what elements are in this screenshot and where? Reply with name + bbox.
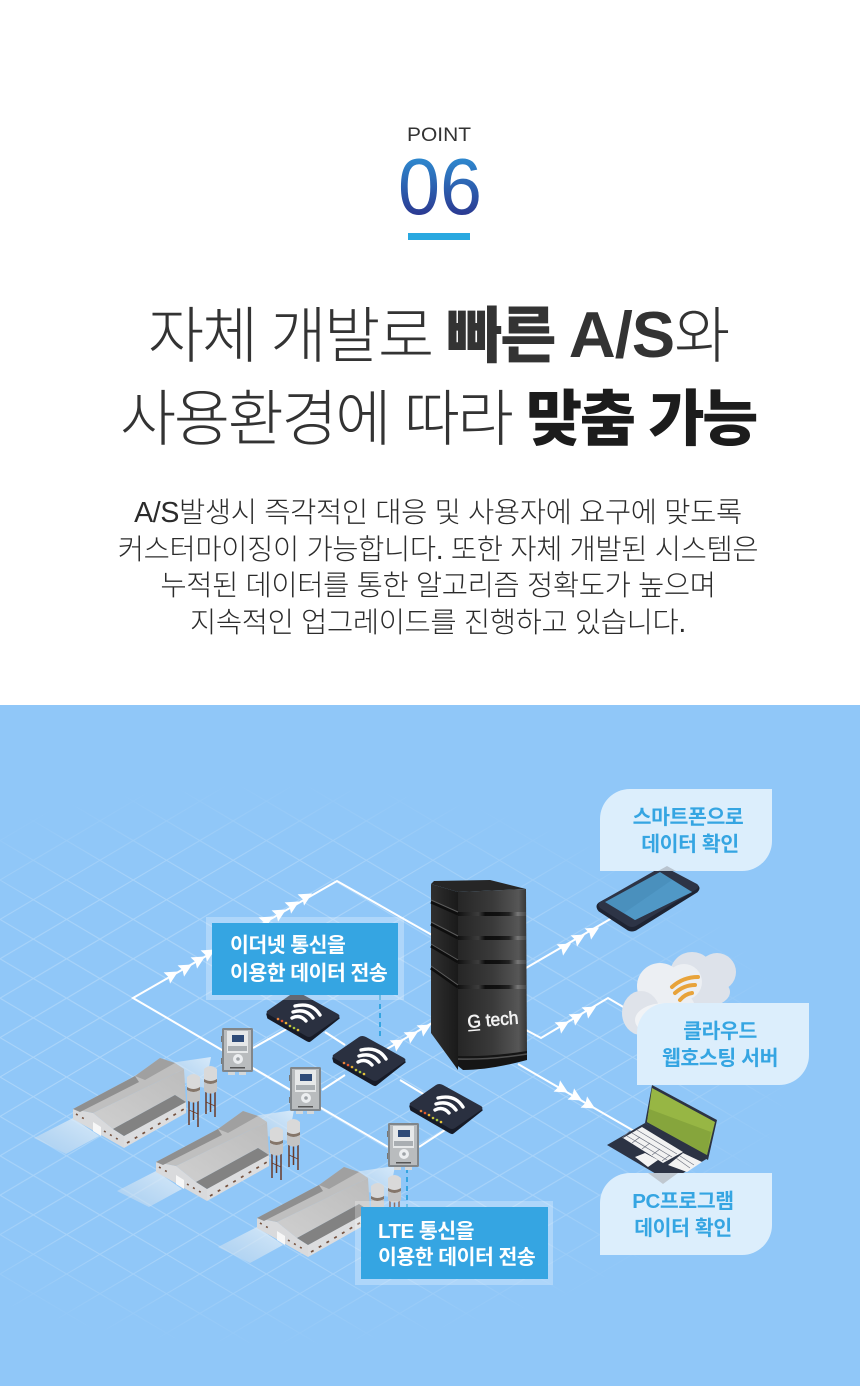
bubble: cloud: 웹호스팅 서버	[662, 1047, 778, 1070]
barn 1 with silos	[34, 1057, 217, 1154]
bubble: smartphone: 데이터 확인	[641, 833, 739, 856]
router 3	[410, 1084, 482, 1133]
point badge	[398, 124, 482, 240]
title line 1: 자체 개발로 빠른 A/S와	[148, 298, 728, 371]
controller 2	[289, 1067, 321, 1114]
callout: ethernet: 이더넷 통신을	[230, 934, 345, 957]
callout: LTE	[355, 1201, 553, 1285]
barn 2 with silos	[117, 1110, 300, 1207]
bubble: smartphone: 스마트폰으로	[633, 806, 744, 829]
description text	[118, 497, 758, 638]
number: 06: 06	[398, 142, 482, 231]
illustration panel: data network	[0, 705, 860, 1386]
callout: LTE: 이용한 데이터 전송	[378, 1246, 535, 1269]
bubble: cloud	[637, 1003, 809, 1085]
flow arrows	[164, 888, 602, 1114]
bubble: smartphone	[600, 789, 772, 871]
label: POINT: POINT	[407, 124, 471, 146]
laptop	[607, 1085, 717, 1178]
server logo: G tech	[467, 1008, 519, 1032]
smartphone	[597, 866, 699, 931]
dashed link lines	[380, 995, 407, 1207]
connection lines	[133, 881, 634, 1147]
controller 3	[387, 1123, 419, 1170]
bubble: PC	[600, 1173, 772, 1255]
description text: 누적된 데이터를 통한 알고리즘 정확도가 높으며	[160, 570, 716, 602]
barn 3 with silos	[218, 1166, 401, 1263]
blue background	[0, 705, 860, 1386]
server tower	[431, 880, 527, 1070]
callout: ethernet: 이용한 데이터 전송	[230, 962, 387, 985]
callout: ethernet	[206, 917, 404, 1000]
router 2	[333, 1036, 406, 1085]
router 1	[267, 992, 340, 1041]
title line 2: 사용환경에 따라 맞춤 가능	[120, 385, 756, 453]
controller 1	[221, 1028, 253, 1075]
description text: 커스터마이징이 가능합니다. 또한 자체 개발된 시스템은	[118, 534, 758, 566]
accent bar	[408, 233, 470, 240]
bubble: PC: PC프로그램	[632, 1190, 734, 1213]
cloud	[622, 952, 736, 1037]
description text: 지속적인 업그레이드를 진행하고 있습니다.	[190, 606, 686, 638]
bubble: cloud: 클라우드	[683, 1020, 757, 1043]
bubble: PC: 데이터 확인	[634, 1217, 732, 1240]
description text: A/S발생시 즉각적인 대응 및 사용자에 요구에 맞도록	[134, 497, 742, 529]
callout: LTE: LTE 통신을	[378, 1220, 474, 1243]
isometric floor grid	[0, 812, 732, 1318]
